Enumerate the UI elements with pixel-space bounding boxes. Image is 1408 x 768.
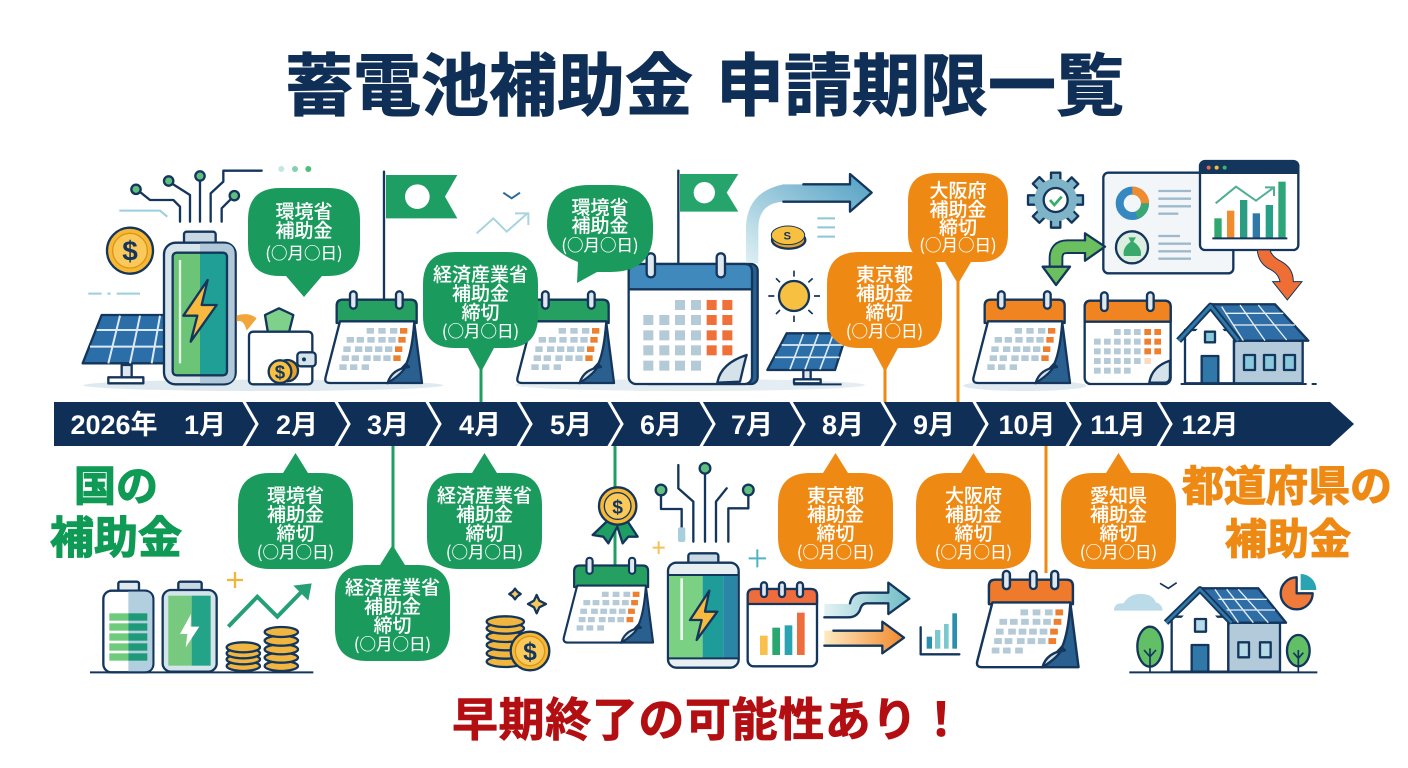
icon: cloud and bird	[1114, 583, 1177, 611]
month labels	[70, 410, 1239, 440]
icon: green flag large	[678, 171, 738, 265]
arrow: orange	[824, 622, 904, 653]
callout: environment ministry bottom	[238, 453, 353, 569]
month labels: 2026年	[70, 410, 158, 440]
callout: METI top: (○月○日)	[442, 318, 519, 342]
month labels: 7月	[731, 410, 773, 440]
icon: battery with bars	[103, 582, 153, 672]
arrow: teal	[824, 583, 909, 617]
callout: environment ministry top: 補助金	[275, 216, 333, 243]
icon: gold coin: S	[784, 230, 792, 242]
callout: METI lower: (○月○日)	[354, 631, 431, 655]
callout: Osaka top: 補助金	[929, 195, 987, 222]
arrow: green double	[1043, 233, 1105, 285]
icon: pie chart	[1281, 574, 1316, 609]
icon: coin stacks	[227, 627, 298, 671]
callout: Aichi bottom: 締切	[1099, 519, 1138, 546]
leader lines	[393, 270, 1046, 573]
month labels: 2月	[276, 410, 318, 440]
callout: Tokyo bottom: (○月○日)	[797, 539, 874, 563]
month labels: 5月	[550, 410, 592, 440]
callout: Tokyo top: 補助金	[856, 279, 913, 306]
top centre icon group: big calendar, flag, arrow, sun, solar panel	[629, 171, 872, 384]
calendar: green bottom	[564, 558, 653, 643]
icon: growth arrow	[477, 193, 528, 233]
callout: Tokyo bottom	[778, 453, 893, 569]
callout: METI lower	[335, 545, 450, 661]
icon: solar panel small	[767, 333, 847, 384]
month labels: 10月	[998, 410, 1056, 440]
icon: battery	[164, 232, 236, 384]
panel: report document	[1103, 173, 1233, 273]
calendar: orange tilted (October)	[973, 291, 1070, 383]
callout: Tokyo bottom: 東京都	[807, 481, 864, 508]
month labels: 11月	[1090, 410, 1146, 440]
icon: green flag	[384, 172, 457, 300]
icon: dollar coin: $	[122, 236, 138, 267]
timeline arrow bar	[54, 400, 1354, 448]
callout: environment ministry May	[547, 185, 653, 283]
calendar: green tilted (May)	[517, 291, 614, 383]
callout: environment ministry May: 環境省	[571, 193, 629, 220]
callout: Tokyo top: 東京都	[856, 260, 913, 287]
callout: environment ministry May: 補助金	[571, 211, 629, 238]
callout: environment ministry top: 環境省	[275, 197, 333, 224]
month labels: 8月	[822, 410, 864, 440]
callout: Osaka top: (○月○日)	[919, 232, 997, 256]
callout: environment ministry bottom: 締切	[276, 519, 315, 546]
icon: circuit lines	[653, 463, 766, 567]
callout: environment ministry bottom: 補助金	[267, 500, 324, 527]
callout: Tokyo bottom: 締切	[816, 519, 855, 546]
title	[285, 31, 1124, 130]
callout: environment ministry bottom: (○月○日)	[257, 539, 334, 563]
callout: Osaka top	[908, 173, 1008, 284]
callout: environment ministry May: (○月○日)	[561, 232, 639, 256]
callout: METI bottom: 経済産業省	[437, 481, 532, 508]
callout: Tokyo top: 締切	[865, 298, 904, 325]
callout: Osaka bottom: 補助金	[945, 500, 1002, 527]
arrow: orange down	[1257, 250, 1302, 300]
callout: METI bottom: (○月○日)	[446, 539, 523, 563]
callout: Osaka top: 締切	[939, 213, 977, 240]
icon: sun	[768, 271, 820, 322]
calendar: large blue	[629, 253, 758, 384]
label: prefectural subsidies	[1182, 453, 1392, 567]
callout: METI lower: 補助金	[364, 592, 421, 619]
panel: bar chart window	[1200, 161, 1298, 250]
icon: small bar chart	[921, 613, 959, 654]
bottom left icon group: batteries, rising arrow, coins	[90, 572, 313, 672]
callout: Aichi bottom: 補助金	[1090, 500, 1147, 527]
callout: Osaka bottom: 締切	[954, 519, 993, 546]
calendar: orange large	[977, 571, 1079, 667]
icon: coins and sparkles	[487, 589, 549, 670]
callout: METI bottom: 補助金	[456, 500, 513, 527]
month labels: 4月	[459, 410, 501, 440]
month labels: 3月	[367, 410, 409, 440]
callout: Aichi bottom: 愛知県	[1090, 481, 1147, 508]
title: 蓄電池補助金	[285, 31, 693, 130]
icon: house with solar roof and trees	[1129, 588, 1317, 672]
icon: gear	[1028, 173, 1083, 228]
callout: environment ministry top	[248, 188, 360, 297]
icon: gold coin	[771, 226, 805, 249]
callout: METI bottom: 締切	[465, 519, 504, 546]
callout: METI top: 締切	[461, 298, 500, 325]
calendar: bar chart	[748, 582, 817, 666]
icon: coins and sparkles: $	[523, 639, 537, 666]
callout: METI lower: 締切	[373, 611, 412, 638]
callout: METI top	[423, 252, 538, 372]
icon: battery	[668, 553, 739, 668]
callout: Aichi bottom	[1061, 453, 1176, 569]
callout: environment ministry bottom: 環境省	[267, 481, 324, 508]
month labels: 12月	[1181, 410, 1239, 440]
callout: METI bottom	[427, 453, 542, 569]
callout: environment ministry top: (○月○日)	[265, 240, 343, 264]
icon: wallet with coin	[237, 308, 316, 384]
month labels: 1月	[184, 410, 226, 440]
callout: METI top: 経済産業省	[433, 260, 528, 287]
callout: Tokyo bottom: 補助金	[807, 500, 864, 527]
icon: award medal: $	[612, 497, 623, 518]
top right icon group: gear, dashboard, calendars, house	[963, 161, 1317, 391]
title: 申請期限一覧	[716, 31, 1124, 130]
callout: Osaka bottom: (○月○日)	[935, 539, 1012, 563]
callout: Osaka top: 大阪府	[929, 176, 987, 203]
icon: charged battery	[163, 582, 217, 672]
month labels: 9月	[913, 410, 955, 440]
callout: Osaka bottom: 大阪府	[945, 481, 1002, 508]
warning message: 早期終了の可能性あり！	[452, 684, 964, 750]
callout: Osaka bottom	[916, 453, 1031, 569]
ground shadow centre	[515, 379, 865, 391]
bottom centre icon group: coins, medal, calendar, battery, charts, arrows	[487, 463, 909, 670]
callout: METI lower: 経済産業省	[345, 573, 440, 600]
label: prefectural subsidies: 都道府県の	[1182, 453, 1392, 514]
calendar: orange straight	[1085, 292, 1171, 384]
icon: dollar coin	[107, 228, 153, 274]
month labels: 6月	[640, 410, 682, 440]
calendar: green tilted (March)	[325, 291, 422, 383]
icon: solar panel	[83, 315, 167, 383]
label: national subsidies: 補助金	[50, 502, 182, 566]
label: prefectural subsidies: 補助金	[1225, 506, 1351, 567]
label: national subsidies	[50, 453, 182, 566]
callout: Tokyo top: (○月○日)	[846, 318, 923, 342]
callout: Tokyo top	[827, 252, 942, 372]
icon: rising arrow	[227, 572, 312, 627]
icon: award medal	[593, 487, 638, 543]
callout: METI top: 補助金	[452, 279, 509, 306]
callout: Aichi bottom: (○月○日)	[1080, 539, 1157, 563]
bottom right icon group: small chart, calendar, house	[921, 571, 1317, 672]
icon: house with solar roof	[1179, 304, 1317, 384]
top left icon group: solar panel, battery, wallet, calendar, flag	[83, 166, 528, 391]
icon: wallet with coin: $	[275, 362, 286, 383]
label: national subsidies: 国の	[74, 453, 158, 514]
icon: curved blue arrow	[746, 174, 872, 263]
icon: circuit lines	[88, 166, 311, 294]
